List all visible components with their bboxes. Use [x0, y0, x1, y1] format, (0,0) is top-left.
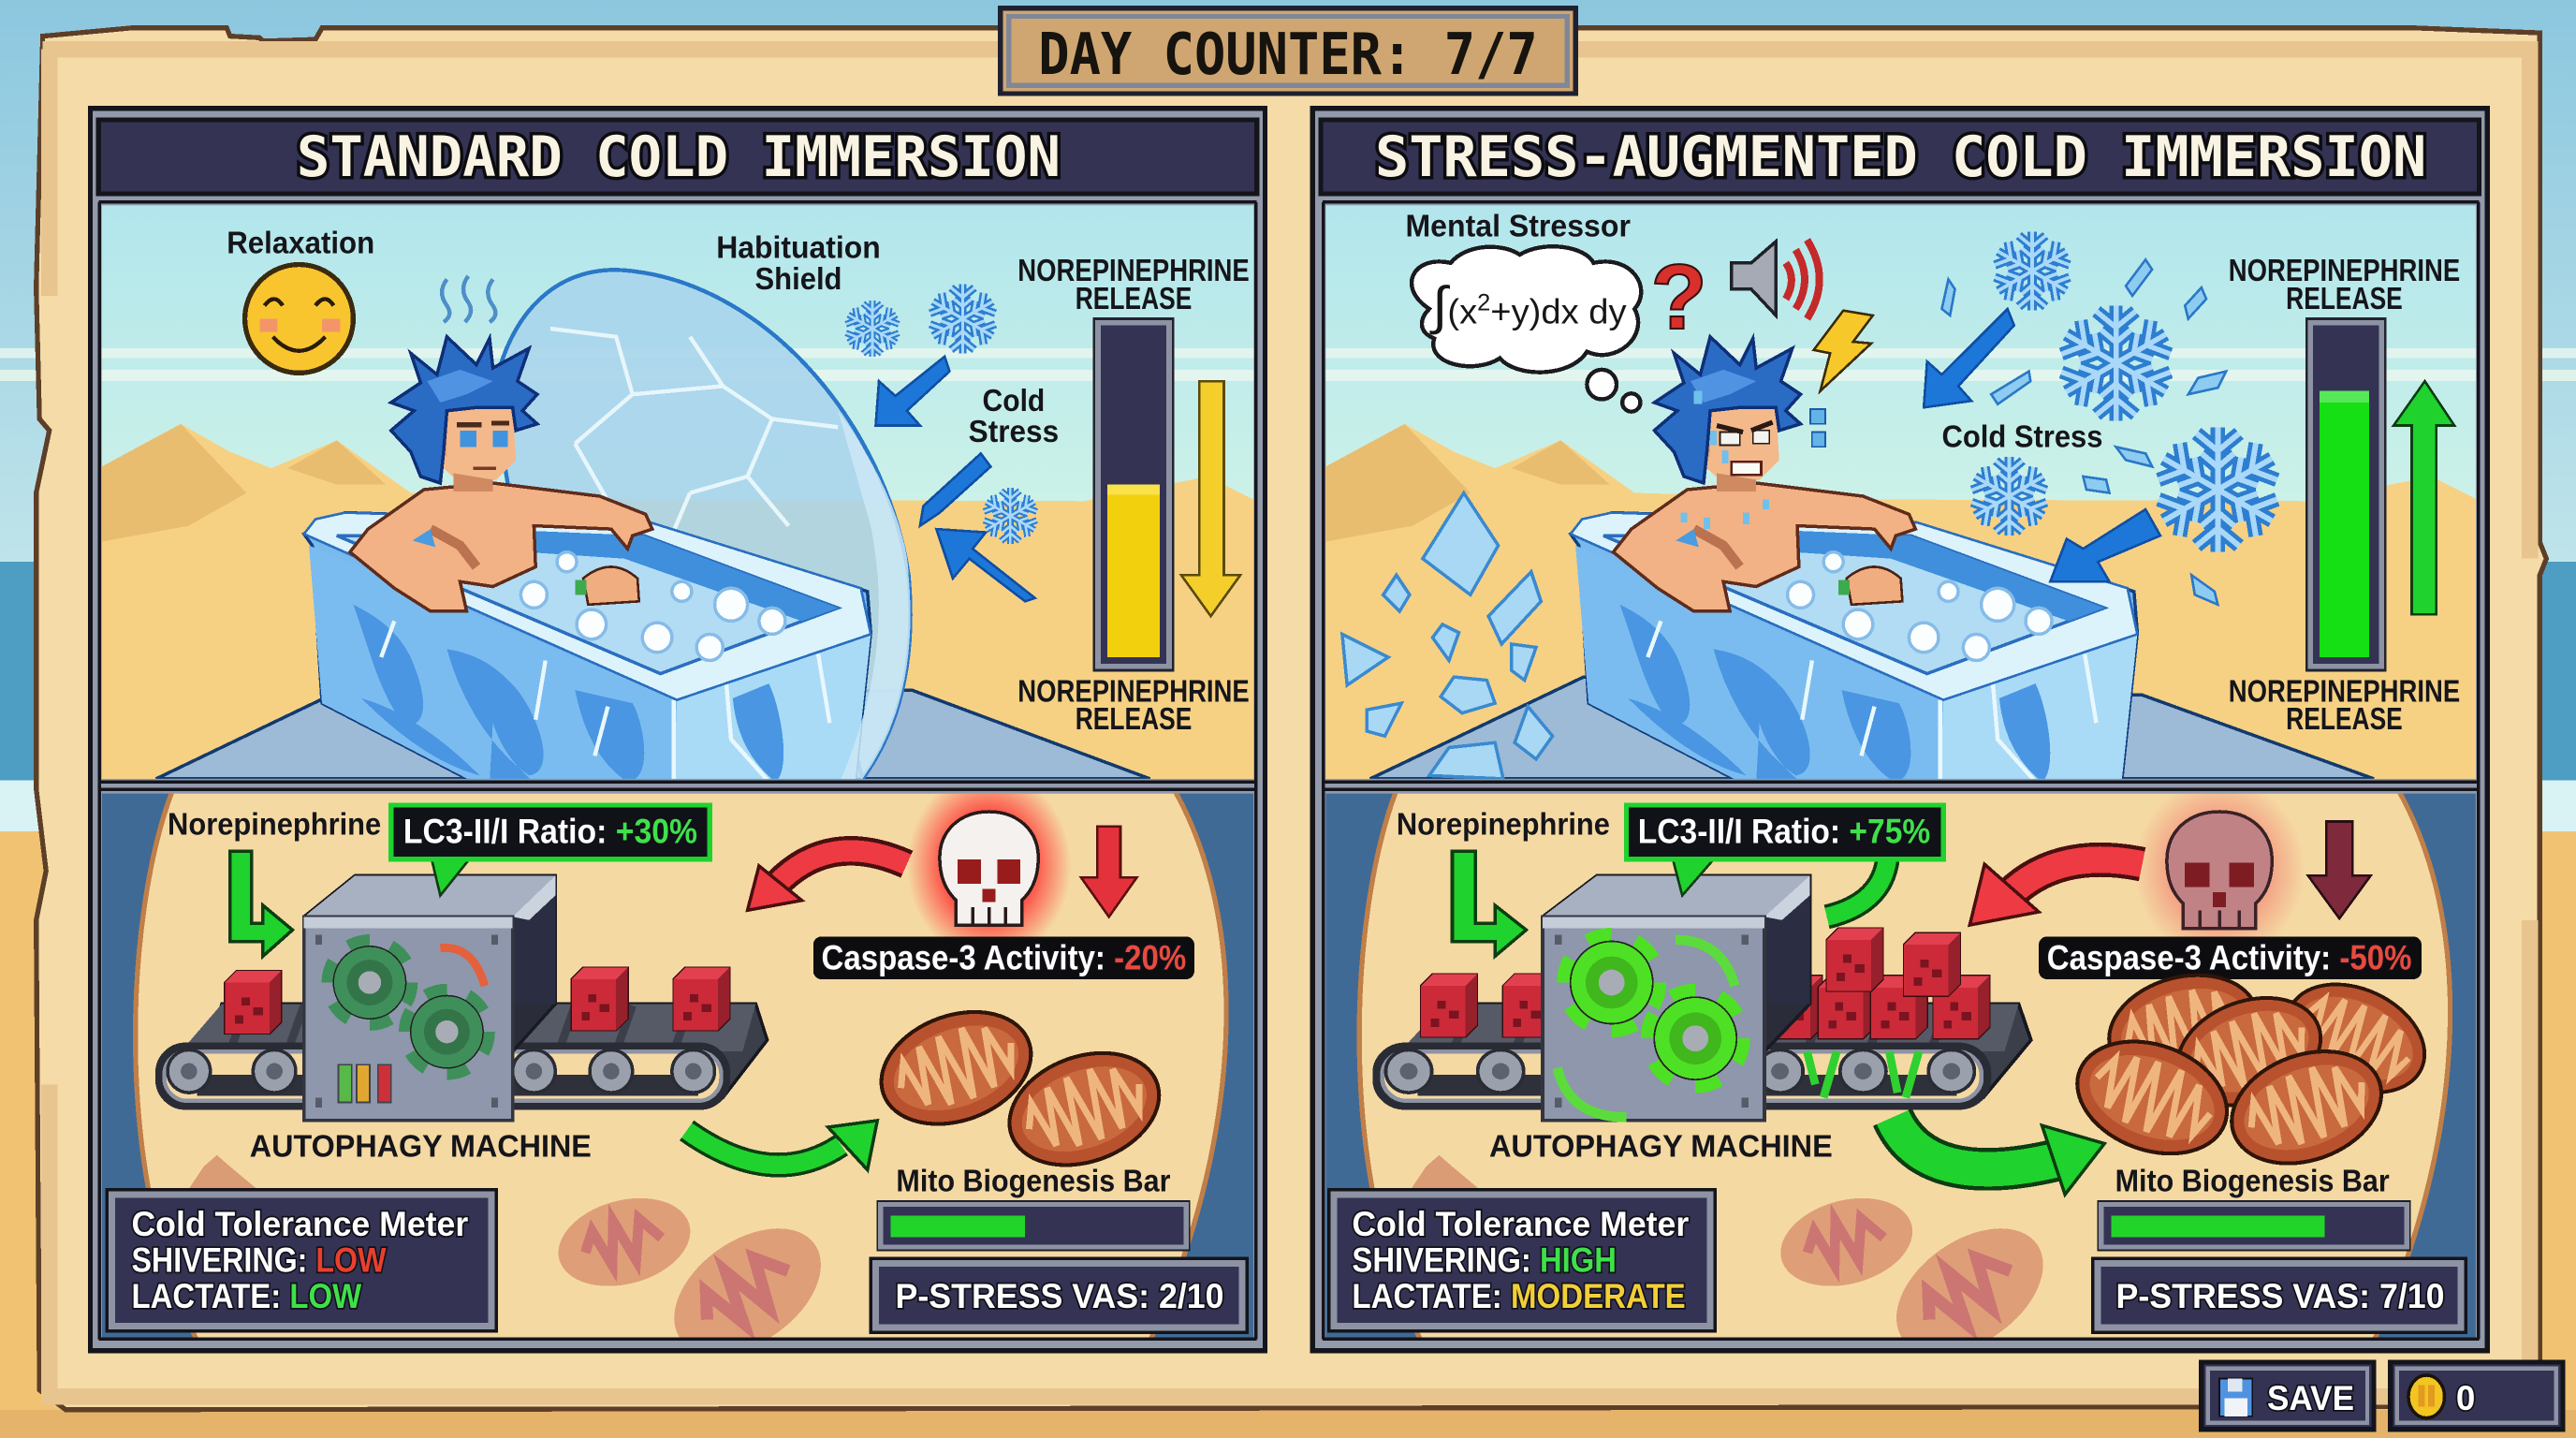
- label: norepinephrine: Norepinephrine: [168, 808, 381, 843]
- label: mito biogenesis: Mito Biogenesis Bar: [2115, 1164, 2390, 1198]
- habituation shield dome: [493, 270, 911, 779]
- arrow: curved green big: [1893, 1117, 2104, 1195]
- drops: [1810, 409, 1825, 447]
- icon: coin: [2408, 1375, 2445, 1418]
- icon: skull muted: [2134, 777, 2305, 961]
- formula: 2: [1477, 291, 1490, 316]
- coin counter: 0: [2456, 1379, 2475, 1417]
- norepinephrine bottom label: RELEASE: [1076, 702, 1192, 737]
- box: cold tolerance: LACTATE: LOW: [131, 1277, 361, 1315]
- callout: LC3 ratio: LC3-II/I Ratio: +75%: [1638, 812, 1930, 850]
- label: habituation shield: Shield: [754, 262, 842, 297]
- lower panel: standard mechanism: [101, 794, 1254, 1337]
- label: cold stress: Cold Stress: [1942, 419, 2102, 454]
- bar: mito biogenesis: [877, 1201, 1190, 1251]
- callout: LC3 ratio: [391, 805, 710, 895]
- conveyor belt: [159, 1004, 768, 1106]
- arrows: cold stress: [1924, 309, 2160, 581]
- norepinephrine top label: RELEASE: [2286, 282, 2403, 316]
- faded mitochondria: [189, 1155, 821, 1337]
- heading: stress: STRESS-AUGMENTED COLD IMMERSION: [1375, 125, 2426, 190]
- label: caspase activity: Caspase-3 Activity: -50%: [2047, 938, 2411, 976]
- formula: +y)dx dy: [1490, 293, 1627, 331]
- protein cubes: [1421, 929, 1989, 1038]
- lower panel: stressed mechanism: [1323, 777, 2479, 1380]
- label: cold stress: [970, 389, 1058, 442]
- scene/lower frame lines: [98, 202, 1257, 1339]
- norepinephrine top label: RELEASE: [1076, 282, 1192, 316]
- save button: SAVE: [2267, 1379, 2354, 1417]
- norepinephrine top label: NOREPINEPHRINE: [2229, 254, 2460, 288]
- bar: mito biogenesis: [2098, 1201, 2410, 1251]
- faded mitochondria: [1410, 1155, 2066, 1380]
- day counter text: DAY COUNTER: 7/7: [1038, 22, 1538, 88]
- box: cold tolerance: SHIVERING: HIGH: [1352, 1240, 1617, 1279]
- autophagy machine: [1543, 875, 1809, 1121]
- scene/lower frame lines: [1323, 202, 2479, 1339]
- norepinephrine gauge: high: [2306, 318, 2385, 670]
- arrow: norepinephrine in: [230, 851, 292, 956]
- icon: smiley relaxation: [245, 265, 353, 373]
- box: cold tolerance: Cold Tolerance Meter: [131, 1205, 468, 1243]
- box: cold tolerance: Cold Tolerance Meter: [1352, 1205, 1689, 1243]
- norepinephrine bottom label: [1019, 680, 1249, 730]
- arrow: up green: [2393, 381, 2454, 614]
- tub: [304, 513, 871, 788]
- callout: LC3 ratio: LC3-II/I Ratio: +30%: [403, 812, 697, 850]
- box: cold tolerance: SHIVERING: LOW: [131, 1240, 387, 1279]
- icon: skull: [909, 794, 1069, 936]
- icon: steam: [442, 276, 495, 322]
- box: cold tolerance: [107, 1190, 496, 1331]
- icon: question mark: ?: [1651, 245, 1707, 348]
- mitochondria cluster: [2061, 960, 2442, 1183]
- label: habituation shield: [718, 236, 879, 290]
- header bar: standard: [98, 120, 1257, 194]
- norepinephrine bottom label: RELEASE: [2286, 702, 2403, 737]
- shattered ice shield: [1342, 493, 1553, 779]
- arrow: curved green: [687, 1121, 877, 1170]
- tub: [1571, 513, 2137, 788]
- callout: LC3 ratio: [1627, 805, 1943, 895]
- label: norepinephrine: Norepinephrine: [1397, 808, 1610, 843]
- norepinephrine bottom label: NOREPINEPHRINE: [2229, 674, 2460, 709]
- green energy streaks: [1808, 1051, 1919, 1097]
- save button: [2202, 1362, 2374, 1430]
- mitochondria: [880, 1010, 1161, 1167]
- scene: stressed tub: [1323, 204, 2481, 788]
- norepinephrine top label: [1019, 258, 1249, 309]
- arrow: norepinephrine in: [1453, 851, 1526, 956]
- conveyor belt: [1377, 1004, 2031, 1106]
- norepinephrine bottom label: NOREPINEPHRINE: [1017, 674, 1250, 709]
- snowflakes: [1969, 231, 2282, 552]
- formula: ∫(x: [1432, 276, 1476, 335]
- box: p-stress: P-STRESS VAS: 2/10: [896, 1277, 1224, 1315]
- thought bubble: [1412, 246, 1641, 412]
- arrow: curved red: [748, 851, 907, 910]
- arrow: curved red: [1969, 859, 2143, 925]
- heading: standard: STANDARD COLD IMMERSION: [297, 125, 1061, 190]
- protein cubes: [225, 968, 729, 1034]
- panel: standard cold immersion: [91, 109, 1265, 1380]
- scene: standard tub: [98, 204, 1257, 788]
- character stressed: [1613, 337, 1915, 611]
- icon: floppy disk: [2219, 1378, 2252, 1416]
- label: cold stress: Stress: [969, 415, 1059, 449]
- box: p-stress: [871, 1258, 1247, 1332]
- box: cold tolerance: [1329, 1190, 1715, 1331]
- icon: lightning: [1814, 311, 1873, 391]
- label: cold stress: Cold: [983, 384, 1045, 418]
- header bar: stress: [1321, 120, 2479, 194]
- label: autophagy machine: AUTOPHAGY MACHINE: [250, 1130, 592, 1165]
- label: mental stressor: Mental Stressor: [1405, 210, 1631, 244]
- autophagy machine: [304, 875, 555, 1121]
- norepinephrine bottom label: [2229, 674, 2460, 737]
- arrow: down maroon: [2308, 822, 2371, 918]
- arrow: down red: [1081, 827, 1137, 917]
- icon: speaker: [1732, 240, 1820, 318]
- norepinephrine top label: NOREPINEPHRINE: [1017, 254, 1250, 288]
- character relaxed: [350, 337, 652, 611]
- label: habituation shield: Habituation: [716, 231, 881, 266]
- label: caspase activity: Caspase-3 Activity: -20%: [822, 938, 1186, 976]
- green arc from callout: [1827, 858, 1888, 917]
- label: relaxation: Relaxation: [227, 226, 374, 260]
- label: autophagy machine: AUTOPHAGY MACHINE: [1489, 1130, 1833, 1165]
- box: p-stress: [2093, 1258, 2466, 1332]
- box: cold tolerance: LACTATE: MODERATE: [1352, 1277, 1686, 1315]
- coin counter: [2391, 1362, 2563, 1430]
- norepinephrine top label: [2229, 254, 2460, 316]
- snowflakes: [843, 285, 1039, 544]
- panel: stress-augmented cold immersion: [1312, 109, 2487, 1380]
- arrow: down yellow: [1181, 381, 1240, 616]
- box: p-stress: P-STRESS VAS: 7/10: [2116, 1277, 2445, 1315]
- label: mito biogenesis: Mito Biogenesis Bar: [896, 1164, 1171, 1198]
- shield front edge: [838, 411, 911, 779]
- ice shards in air: [1942, 259, 2226, 605]
- arrows: cold stress: [875, 357, 1035, 601]
- day counter banner: [1001, 8, 1575, 94]
- norepinephrine gauge: low: [1094, 318, 1173, 670]
